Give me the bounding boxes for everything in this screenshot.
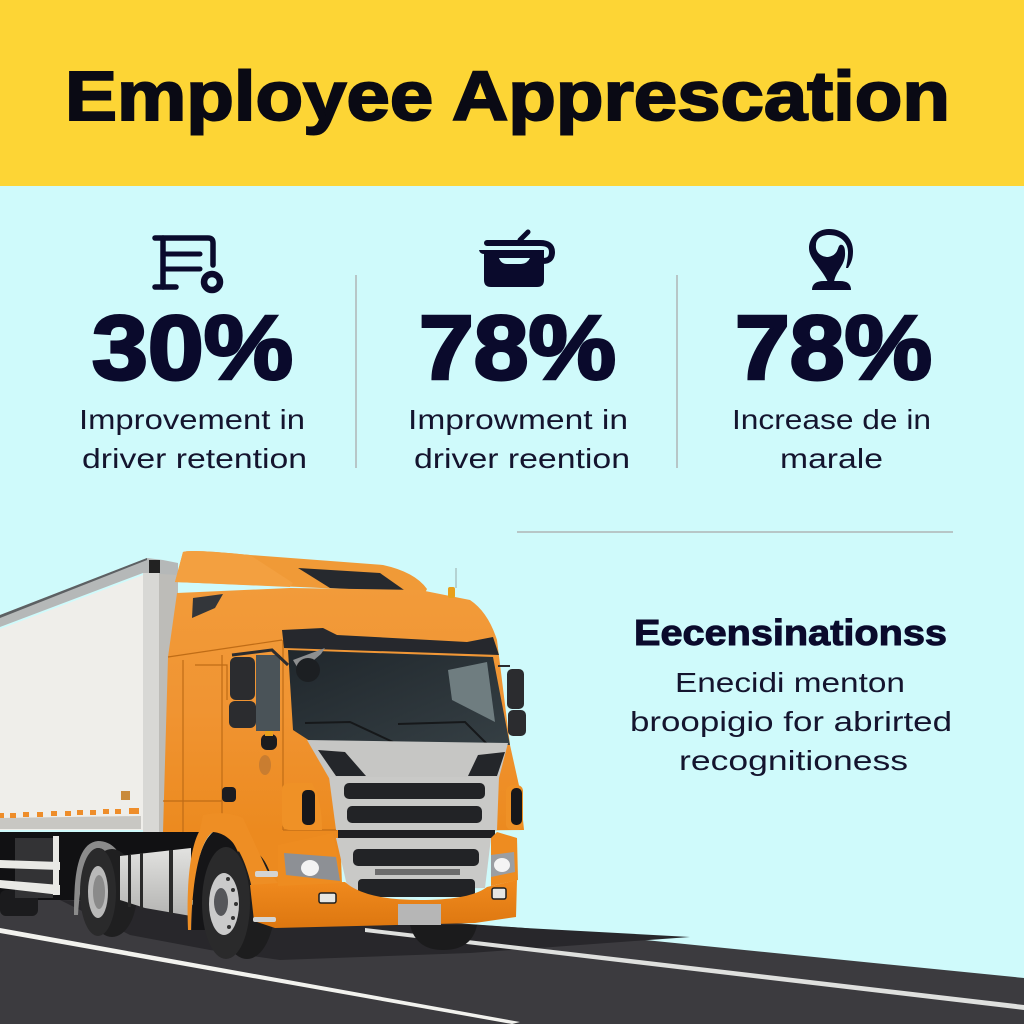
label: driver retention [82, 443, 307, 474]
side panel lines [163, 640, 337, 832]
truck shadow [60, 900, 690, 960]
stat: 30% driver retention [79, 238, 307, 474]
road [0, 898, 1024, 1024]
lower grille [336, 830, 495, 897]
stat: 78% morale [732, 229, 932, 474]
front fender [188, 813, 278, 930]
roof vent [192, 594, 223, 618]
body text [630, 667, 952, 776]
icon: map pin [809, 229, 853, 290]
bumper [250, 832, 518, 928]
cab lower panel [215, 828, 342, 885]
divider [517, 531, 953, 533]
right front wheel [410, 925, 477, 950]
divider [355, 275, 357, 468]
beacon [448, 568, 456, 598]
title: Employee Apprescation [65, 57, 950, 135]
value: 78% [419, 298, 616, 399]
lane line: far [365, 928, 1024, 1010]
label: Improwment in [408, 404, 628, 435]
door handle [222, 787, 236, 802]
wheel arch [192, 832, 260, 930]
sun visor [282, 628, 499, 655]
upper grille panel [307, 740, 508, 778]
mirrors [229, 650, 526, 775]
icon: cart form [155, 238, 220, 290]
headlights [284, 853, 340, 881]
label: Increase de in [732, 404, 931, 435]
body text: Enecidi menton [675, 667, 905, 698]
heading: Eecensinationss [634, 612, 947, 653]
cab body [163, 588, 524, 832]
front wheel [202, 847, 275, 959]
trailer [0, 558, 178, 832]
truck [0, 551, 526, 959]
chrome steps [255, 871, 278, 877]
side window [256, 655, 280, 731]
lane line: near [0, 928, 520, 1024]
sunroof [298, 568, 407, 592]
side corner vents [282, 783, 523, 830]
fuel tank [120, 848, 191, 916]
body text: recognitioness [679, 745, 908, 776]
body text: broopigio for abrirted [630, 706, 952, 737]
label [732, 404, 931, 474]
stat: 78% driver reention [408, 232, 630, 474]
header banner [0, 0, 1024, 186]
roof fairing [175, 551, 427, 593]
rear wheel [74, 841, 137, 937]
chassis [0, 832, 200, 916]
divider [676, 275, 678, 468]
upper grille [329, 777, 499, 830]
label: driver reention [414, 443, 630, 474]
license plate [398, 904, 441, 925]
windshield [288, 648, 510, 745]
label: marale [780, 443, 883, 474]
label [79, 404, 307, 474]
fog lights [319, 893, 336, 903]
value: 78% [735, 298, 932, 399]
label: Improvement in [79, 404, 305, 435]
value: 30% [92, 298, 293, 399]
label [408, 404, 630, 474]
recommendations text block [630, 612, 952, 776]
icon: cooking pot [479, 232, 552, 287]
